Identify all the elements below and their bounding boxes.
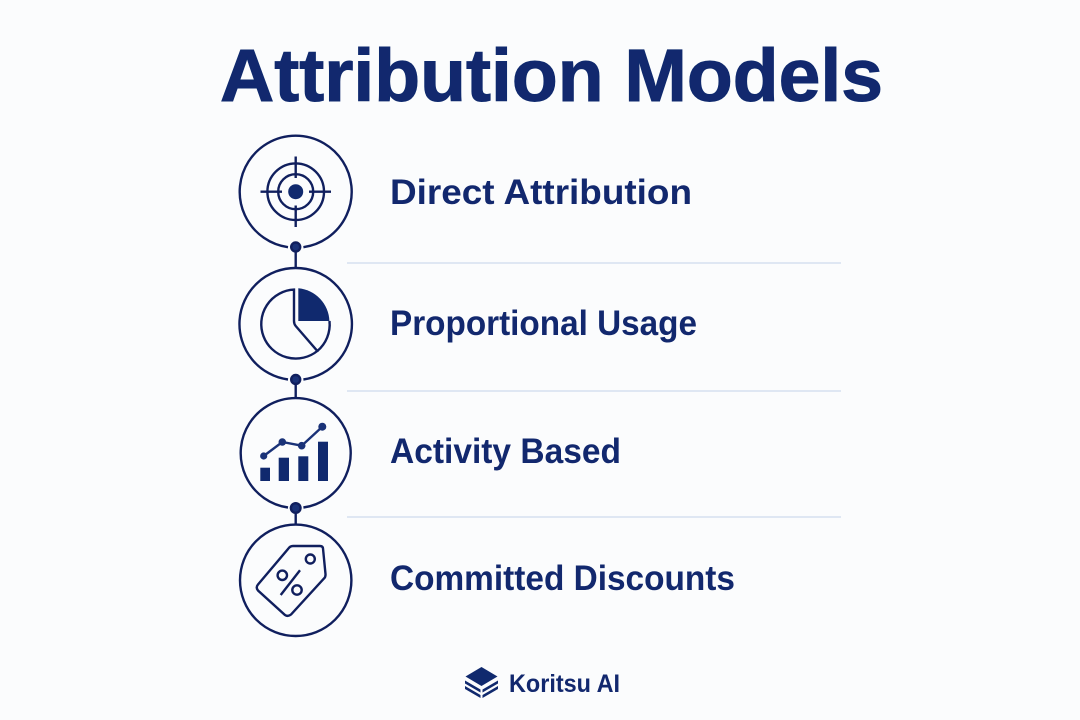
icon: discount tag [240, 525, 351, 636]
label: Activity Based: Activity Based [390, 432, 621, 471]
logo wordmark: Koritsu AI [509, 670, 620, 698]
title: Attribution Models [220, 34, 883, 117]
icon: logo stack [465, 667, 498, 698]
icon: pie chart [239, 268, 352, 380]
connector: timeline links [291, 242, 301, 525]
logo: Koritsu AI [465, 667, 620, 698]
label: Direct Attribution: Direct Attribution [390, 173, 692, 212]
label: Committed Discounts: Committed Discounts [390, 559, 735, 598]
icon: target [240, 136, 352, 247]
icon: growth chart [241, 398, 351, 508]
label: Proportional Usage: Proportional Usage [390, 304, 697, 343]
